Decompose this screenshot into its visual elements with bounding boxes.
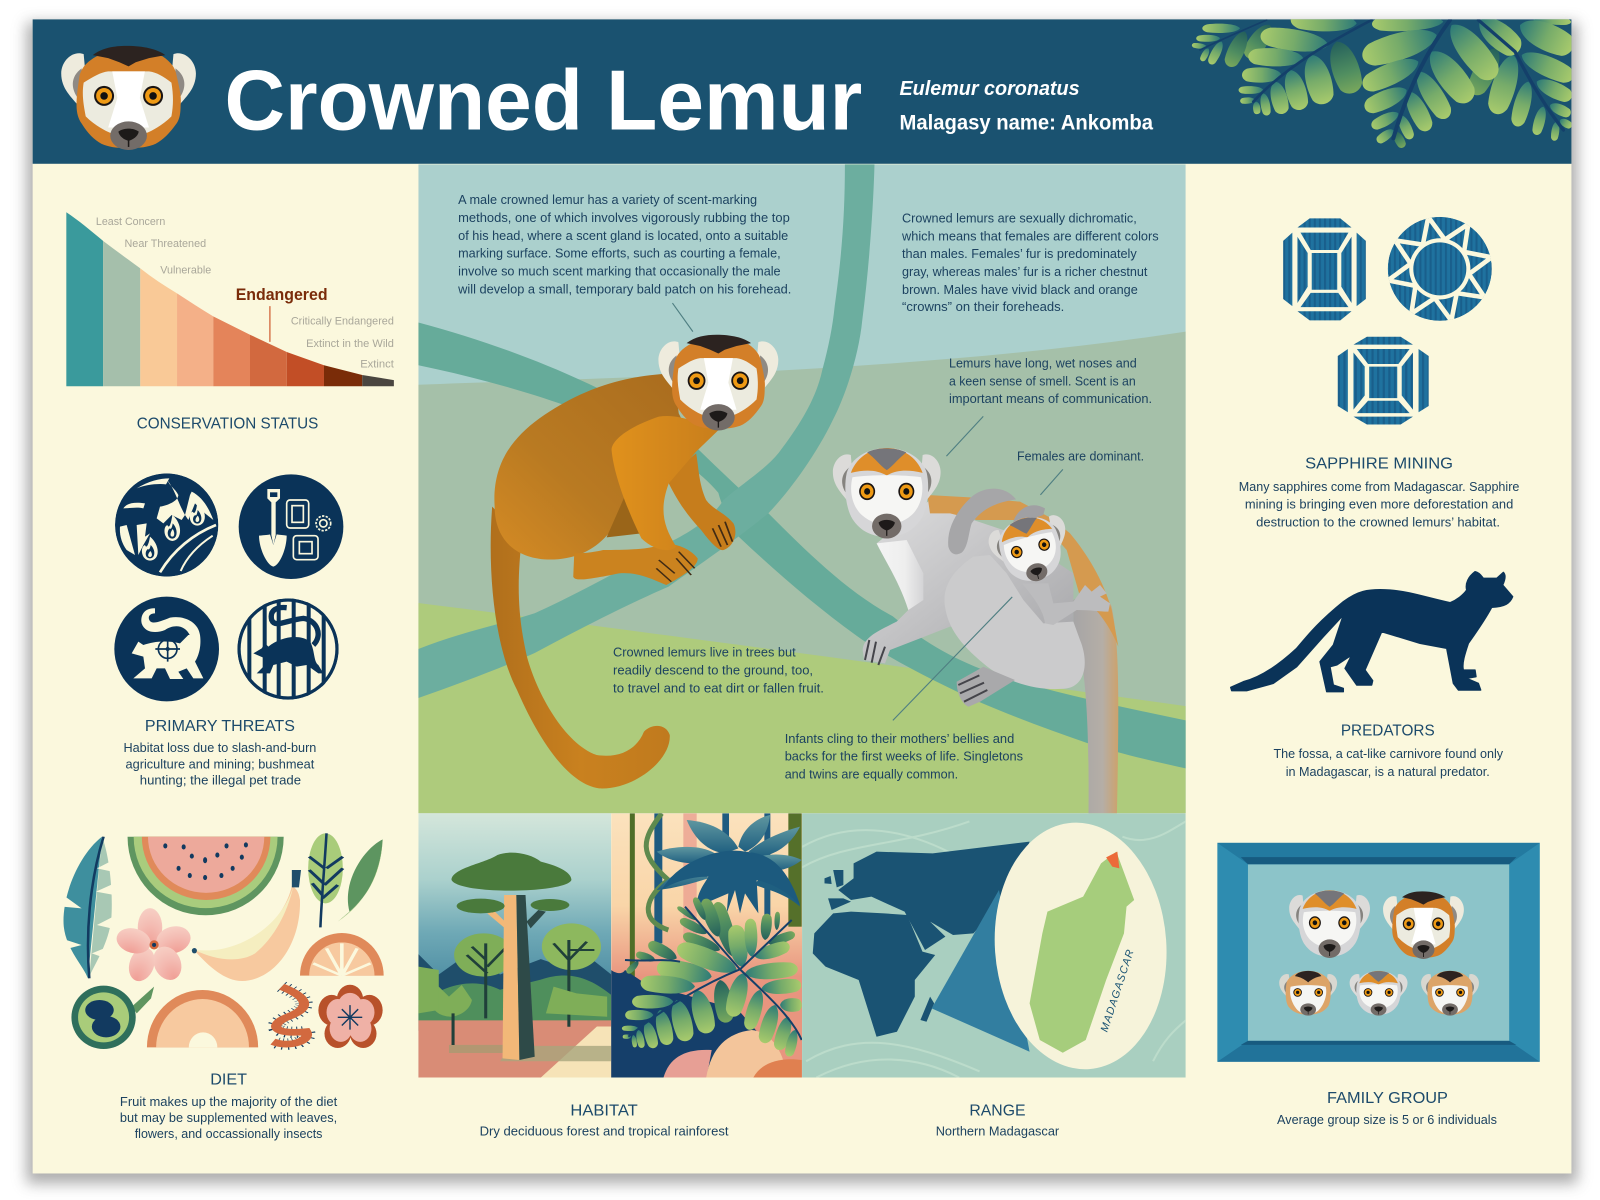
predators description <box>1273 746 1504 779</box>
text: sense of smell: important means of communication. <box>949 391 1152 406</box>
text: scent marking: marking surface. Some efforts, such as courting a female, <box>458 246 781 261</box>
icon: square cut gem <box>1338 337 1429 424</box>
food: orange flower <box>318 985 383 1048</box>
text: range: RANGE <box>969 1102 1026 1119</box>
diet description: Fruit makes up the majority of the diet <box>120 1094 338 1109</box>
sapphire description <box>1239 479 1519 530</box>
young faces <box>1279 971 1479 1016</box>
palm fronds <box>1192 10 1578 150</box>
text: primary threats <box>123 718 316 788</box>
habitat description: Dry deciduous forest and tropical rainforest <box>480 1124 729 1139</box>
palm crown <box>657 815 802 913</box>
panel: lemur scene <box>418 164 1186 827</box>
small trees <box>418 923 607 1045</box>
text: infants: backs for the first weeks of life. Singletons <box>785 749 1023 764</box>
text: infants <box>785 731 1023 782</box>
diet description: flowers, and occassionally insects <box>135 1126 322 1141</box>
leader line: infants <box>893 597 1012 720</box>
text: scent marking: will develop a small, temporary bald patch on his forehead. <box>457 281 791 296</box>
text: sapphire mining <box>1239 455 1519 530</box>
text: scent marking: methods, one of which involves vigorously rubbing the top <box>458 210 790 225</box>
food: flower <box>114 908 194 985</box>
food: centipede <box>273 987 307 1044</box>
text: live in trees: readily descend to the ground, too, <box>613 662 813 677</box>
icon: emerald cut gem <box>1283 218 1366 320</box>
range description: Northern Madagascar <box>936 1124 1060 1139</box>
food: green fruit <box>71 986 154 1049</box>
endangered marker: Endangered <box>236 286 328 304</box>
icon: round cut gem <box>1388 216 1492 321</box>
illustration: diet foods <box>62 833 384 1049</box>
text: dichromatic: gray, whereas males’ fur is a richer chestnut <box>902 264 1148 279</box>
scientific name: Eulemur coronatus <box>899 78 1080 100</box>
text: dichromatic: which means that females are different colors <box>901 228 1159 243</box>
text: scent marking: of his head, where a scent gland is located, onto a suitable <box>458 228 788 243</box>
status labels: Least Concern <box>96 216 165 228</box>
male lemur <box>491 373 735 788</box>
diet description: but may be supplemented with leaves, <box>120 1110 337 1125</box>
icon: slash and burn <box>115 473 218 577</box>
infant head <box>988 515 1066 582</box>
text: scent marking <box>457 192 791 296</box>
header band <box>33 10 1578 164</box>
sapphire description: Many sapphires come from Madagascar. Sapphire <box>1239 479 1519 494</box>
text: sense of smell: a keen sense of smell. Scent is an <box>949 373 1136 388</box>
range highlight <box>1106 852 1119 868</box>
status labels: Near Threatened <box>124 238 206 250</box>
zoom cone <box>932 890 1030 1052</box>
food: banana <box>192 870 301 981</box>
icon: fossa silhouette <box>1231 572 1513 692</box>
panel: deciduous forest <box>418 813 611 1078</box>
text: habitat: HABITAT <box>570 1102 638 1119</box>
map: Madagascar <box>1030 852 1134 1053</box>
text: dichromatic <box>901 210 1159 314</box>
fern fronds <box>622 896 802 1058</box>
family group description: Average group size is 5 or 6 individuals <box>1277 1112 1497 1127</box>
icon: male lemur face <box>61 46 196 150</box>
female head <box>833 448 941 539</box>
status labels <box>96 216 394 370</box>
panel: rainforest <box>611 813 805 1087</box>
baobab tree <box>452 853 571 1060</box>
female lemur with infant <box>833 448 1118 827</box>
food: leaf with feather shape <box>62 837 114 978</box>
food: citrus half <box>300 933 384 976</box>
heading: conservation status: CONSERVATION STATUS <box>137 416 318 433</box>
threats description: Habitat loss due to slash-and-burn <box>123 740 316 755</box>
status labels: Vulnerable <box>160 264 211 276</box>
icon: pet trade cage <box>237 598 339 700</box>
text: infants: and twins are equally common. <box>785 767 958 782</box>
title: Crowned Lemur <box>224 53 862 149</box>
panel: range map <box>802 813 1186 1078</box>
text: primary threats: PRIMARY THREATS <box>145 718 295 735</box>
text: diet <box>120 1072 338 1141</box>
adult faces <box>1289 890 1464 959</box>
threats description: hunting; the illegal pet trade <box>140 773 301 788</box>
text: dichromatic: than males. Females’ fur is predominately <box>902 246 1137 261</box>
leader lines <box>672 303 1063 495</box>
label: Madagascar: MADAGASCAR <box>1099 948 1137 1034</box>
text: dichromatic: “crowns” on their foreheads. <box>902 299 1064 314</box>
icons: primary threats <box>114 473 343 701</box>
text: sense of smell: Lemurs have long, wet noses and <box>949 356 1137 371</box>
food: citrus and arches in diet grid <box>62 833 384 1049</box>
map: Eurasia and Africa <box>813 842 1030 1037</box>
status labels: Critically Endangered <box>291 315 394 327</box>
endangered marker <box>236 286 328 342</box>
text: predators <box>1273 723 1504 779</box>
chart: conservation status <box>66 212 394 386</box>
text: family group: FAMILY GROUP <box>1327 1090 1448 1107</box>
predators description: in Madagascar, is a natural predator. <box>1286 764 1490 779</box>
text: females dominant: Females are dominant. <box>1017 449 1144 464</box>
vine from top right to lower left <box>418 164 874 698</box>
text: diet: DIET <box>210 1072 247 1089</box>
threats description: agriculture and mining; bushmeat <box>126 756 315 771</box>
Malagasy name: Malagasy name: Ankomba <box>899 112 1153 135</box>
magnified oval <box>994 822 1166 1070</box>
rocks <box>664 1030 802 1078</box>
dark undergrowth <box>611 970 756 1078</box>
text: family group <box>1277 1090 1497 1127</box>
text: infants: Infants cling to their mothers’ bellies and <box>785 731 1014 746</box>
food: narrow leaf <box>338 839 383 922</box>
background stems <box>632 813 802 993</box>
icons: sapphires <box>1283 216 1492 424</box>
status labels: Extinct in the Wild <box>306 338 394 350</box>
text: live in trees: to travel and to eat dirt or fallen fruit. <box>613 680 824 695</box>
food: striped leaf <box>308 833 343 927</box>
text: range <box>936 1102 1060 1139</box>
diet description <box>120 1094 338 1141</box>
text: habitat <box>480 1102 729 1139</box>
panel: family group frame <box>1217 843 1540 1062</box>
text: live in trees: Crowned lemurs live in trees but <box>613 645 796 660</box>
food: watermelon <box>128 837 284 915</box>
status labels: Extinct <box>360 358 394 370</box>
food: arch fruit <box>147 990 258 1047</box>
text: live in trees <box>613 647 823 692</box>
text: dichromatic: brown. Males have vivid black and orange <box>902 282 1138 297</box>
sapphire description: mining is bringing even more deforestation and <box>1245 497 1513 512</box>
text: sense of smell <box>949 356 1152 406</box>
sapphire description: destruction to the crowned lemurs’ habitat. <box>1256 515 1500 530</box>
predators description: The fossa, a cat-like carnivore found only <box>1273 746 1504 761</box>
icon: hunting <box>114 597 219 701</box>
text: scent marking: A male crowned lemur has a variety of scent-marking <box>458 192 757 207</box>
vine from upper left to lower right <box>418 322 1186 768</box>
text: scent marking: involve so much scent marking that occasionally the male <box>458 264 781 279</box>
text: sapphire mining: SAPPHIRE MINING <box>1305 455 1453 472</box>
icon: mining <box>239 474 343 579</box>
text: predators: PREDATORS <box>1341 723 1435 740</box>
text: dichromatic: Crowned lemurs are sexually dichromatic, <box>902 210 1137 225</box>
male lemur head <box>658 335 778 430</box>
threats description <box>123 740 316 788</box>
